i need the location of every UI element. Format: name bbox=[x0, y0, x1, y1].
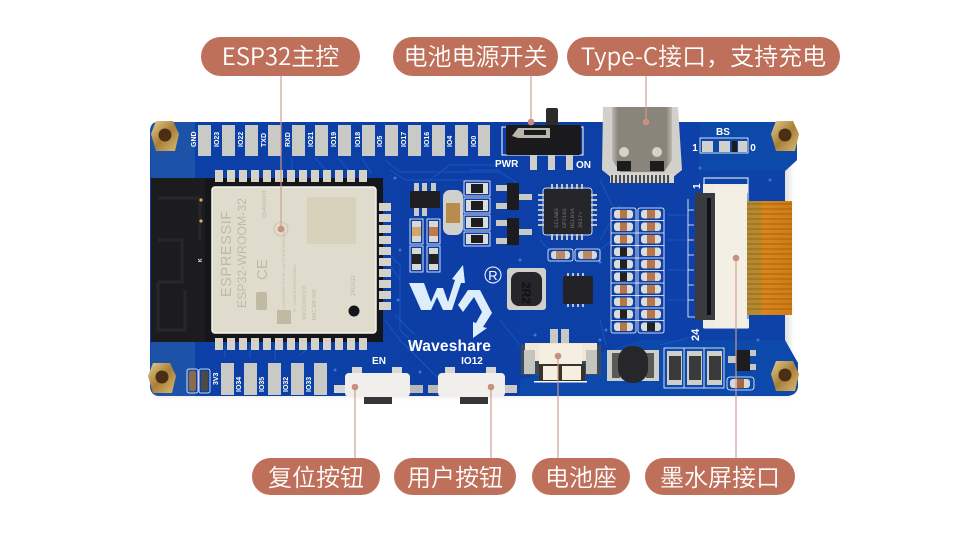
protection diodes bbox=[664, 348, 724, 388]
label: battery socket: 电池座 bbox=[545, 458, 617, 493]
top header pads and labels: IO0 bbox=[471, 136, 478, 147]
Waveshare logo: Waveshare bbox=[408, 338, 491, 355]
transistors bbox=[496, 183, 532, 245]
battery JST socket bbox=[521, 329, 601, 382]
label: user button: 用户按钮 bbox=[407, 458, 503, 493]
top header pads and labels: IO23 bbox=[214, 132, 221, 147]
slide power switch: ON bbox=[576, 160, 591, 171]
CP2102 USB bridge chip: SILABS bbox=[553, 207, 560, 228]
top header pads and labels: IO18 bbox=[355, 132, 362, 147]
BS jumper: BS bbox=[716, 127, 730, 138]
label: reset button: 复位按钮 bbox=[268, 458, 364, 493]
ESP32 module: R 205-000519 FCC ID: 2AC7Z-ESPWROOM32 bbox=[281, 227, 286, 312]
IO12 user button: IO12 bbox=[461, 356, 483, 367]
bottom header pads and labels: IO33 bbox=[306, 377, 313, 392]
bottom header pads and labels: 3V3 bbox=[213, 372, 220, 385]
paired capacitors bbox=[548, 249, 600, 261]
small QFN chip bbox=[563, 273, 593, 307]
top header pads and labels: IO22 bbox=[238, 132, 245, 147]
top header pads and labels: GND bbox=[191, 131, 198, 147]
circuit board bbox=[150, 122, 798, 396]
top header pads and labels: TXD bbox=[261, 133, 268, 147]
bottom header pads and labels: IO32 bbox=[283, 377, 290, 392]
slide power switch: PWR bbox=[495, 159, 519, 170]
top header pads and labels: IO21 bbox=[308, 132, 315, 147]
CP2102 USB bridge chip: DCL01A bbox=[569, 207, 576, 228]
bottom header pads and labels: IO34 bbox=[236, 377, 243, 392]
ESP32 module: IC: 21098-ESPWROOM32 bbox=[292, 264, 297, 312]
ESP32 module: ESP32-WROOM-32 bbox=[235, 198, 249, 308]
ESP32 module: CE bbox=[254, 259, 271, 280]
top header pads and labels bbox=[191, 125, 490, 156]
ESP32 module: ESPRESSIF bbox=[219, 210, 235, 297]
label: battery socket bbox=[532, 458, 630, 495]
2R2 power inductor bbox=[507, 268, 546, 310]
top header pads and labels: IO5 bbox=[377, 136, 384, 147]
ESP32 module: QUADRANT bbox=[262, 190, 268, 218]
top header pads and labels: RXD bbox=[285, 132, 292, 147]
board shadow bbox=[156, 134, 790, 396]
EN reset button bbox=[334, 356, 423, 404]
top header pads and labels: IO17 bbox=[401, 132, 408, 147]
CP2102 USB bridge chip: CP2102 bbox=[561, 208, 568, 228]
ESP32 module: MAC:98F4AB bbox=[312, 289, 318, 320]
bottom header pads and labels bbox=[187, 363, 327, 395]
CP2102 USB bridge chip bbox=[538, 184, 597, 240]
ESP32 module bbox=[205, 170, 391, 350]
BS jumper: 1 bbox=[692, 143, 698, 154]
antenna keep-out: K bbox=[198, 258, 204, 262]
slide power switch bbox=[495, 108, 591, 171]
BS jumper bbox=[692, 127, 756, 154]
EN reset button: EN bbox=[372, 356, 386, 367]
CP2102 USB bridge chip: 2017+ bbox=[577, 211, 584, 228]
top header pads and labels: IO19 bbox=[331, 132, 338, 147]
IO12 user button bbox=[428, 356, 517, 404]
bottom header pads and labels: IO35 bbox=[259, 377, 266, 392]
Waveshare logo bbox=[408, 265, 501, 355]
Waveshare logo: R bbox=[488, 268, 498, 283]
FPC e-paper connector: 24 bbox=[690, 328, 702, 341]
top header pads and labels: IO4 bbox=[447, 136, 454, 147]
SOT transistor and small resistor bbox=[727, 350, 756, 390]
USB Type-C connector bbox=[602, 107, 682, 183]
antenna keep-out bbox=[151, 178, 207, 342]
pcb traces bbox=[225, 158, 700, 380]
callout lines and dots bbox=[274, 76, 739, 458]
top header pads and labels: IO16 bbox=[424, 132, 431, 147]
mounting standoffs bbox=[148, 121, 799, 393]
FPC e-paper connector bbox=[688, 178, 792, 341]
label: ESP32 main controller bbox=[201, 37, 360, 76]
ESP32 module: 240A32 bbox=[351, 275, 357, 296]
large inductor bbox=[607, 346, 659, 383]
label: ESP32 main controller: ESP32主控 bbox=[222, 37, 339, 72]
ESP32 module: SN:230200 L59 bbox=[302, 285, 308, 320]
voltage regulator and passives bbox=[410, 181, 490, 272]
label: e-paper interface: 墨水屏接口 bbox=[660, 458, 780, 493]
BS jumper: 0 bbox=[750, 143, 756, 154]
label: battery power switch: 电池电源开关 bbox=[404, 37, 548, 72]
label: Type-C port with charging: Type-C接口，支持充电 bbox=[581, 37, 826, 72]
resistor array bbox=[611, 208, 664, 333]
2R2 power inductor: 2R2 bbox=[519, 282, 533, 304]
FPC e-paper connector: 1 bbox=[692, 183, 703, 189]
